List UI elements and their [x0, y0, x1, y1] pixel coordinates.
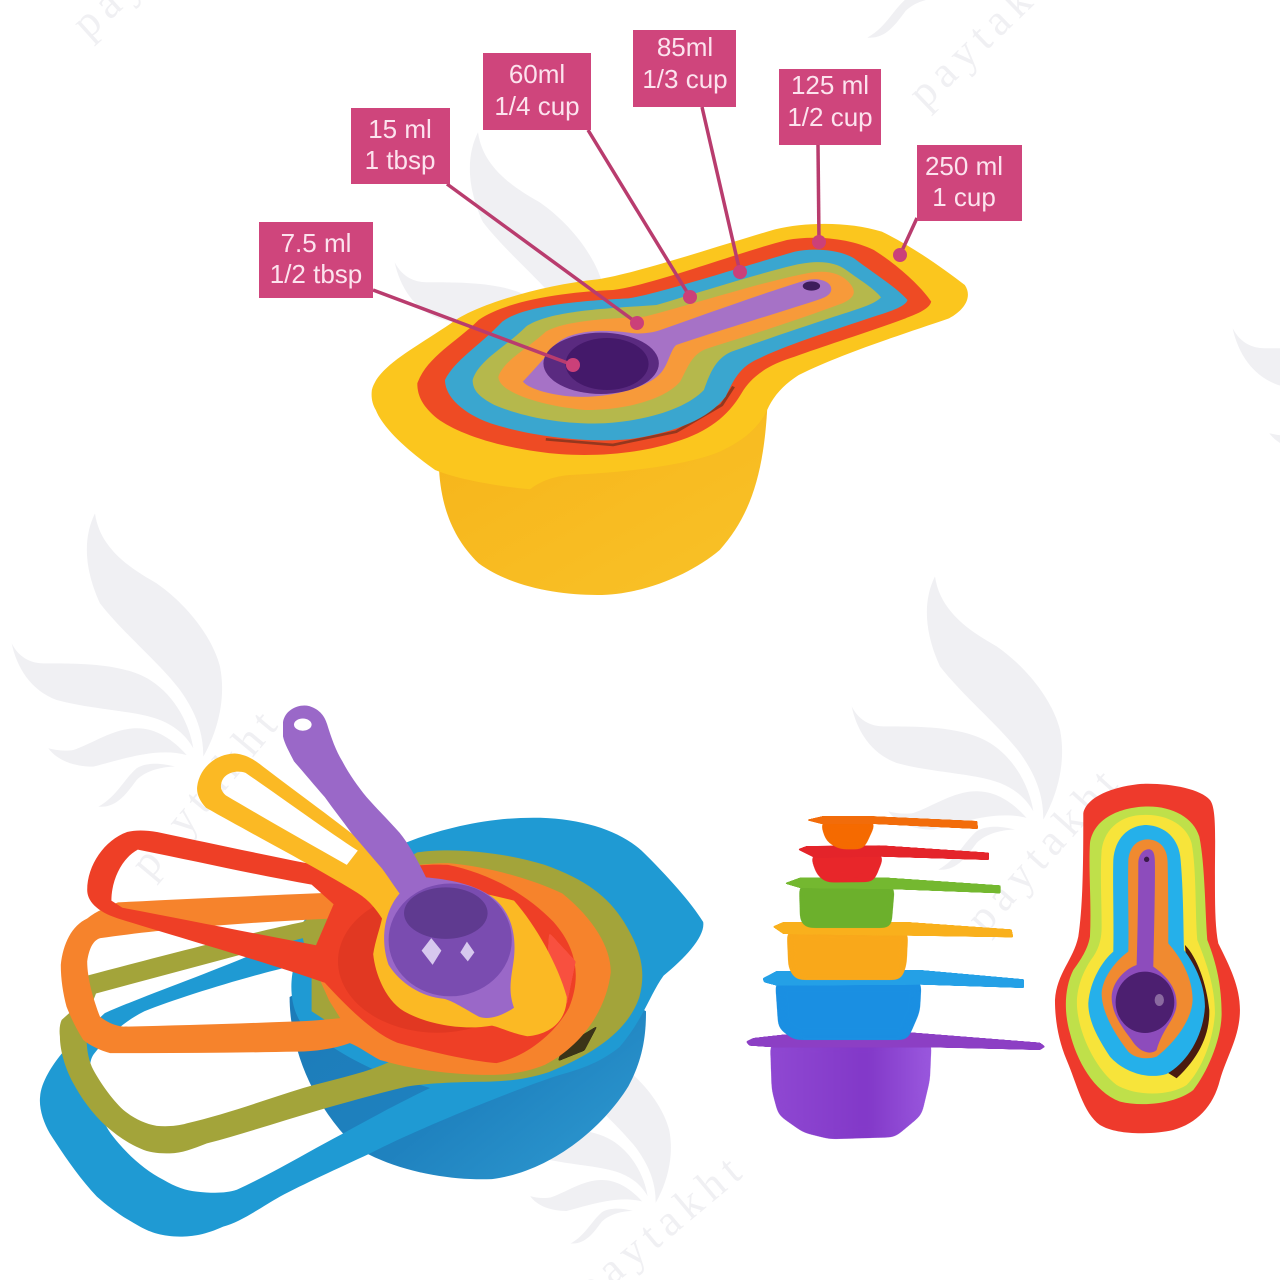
callout 15 ml	[351, 108, 644, 330]
purple cup rim and handle	[746, 1033, 1045, 1050]
purple spoon	[1112, 849, 1177, 1053]
callout 125 ml	[779, 69, 881, 249]
yellow rim and handle	[372, 224, 968, 489]
green cup rim and handle	[784, 878, 1001, 893]
spoon bowl interior	[1116, 972, 1174, 1033]
watermark text: bottom left: paytakht	[120, 696, 291, 886]
purple cup body	[770, 1040, 932, 1139]
watermark wing: right edge	[1233, 198, 1280, 492]
red layer	[417, 238, 931, 455]
callout 7.5 ml: 1/2 tbsp	[270, 259, 362, 289]
product photo: six stacked cups, side view (bottom right)	[746, 816, 1045, 1139]
callout 60 ml: 60ml	[509, 59, 565, 89]
callout 125 ml: 1/2 cup	[787, 102, 873, 132]
orange cup rim and handle	[806, 816, 978, 829]
blue layer	[1088, 825, 1205, 1076]
olive layer	[473, 262, 881, 423]
dark inner shadow	[1163, 945, 1209, 1078]
callout 60 ml: 1/4 cup	[494, 91, 580, 121]
callout 85 ml: 85ml	[657, 32, 713, 62]
callout 250 ml: 1 cup	[932, 182, 996, 212]
spoon highlights	[422, 938, 474, 965]
dark gap between olive and orange	[558, 1026, 598, 1061]
watermark wing: middle right	[852, 576, 1062, 870]
yellow cup rim and handle	[773, 922, 1013, 937]
red cup body	[809, 853, 885, 883]
orange cup body	[819, 820, 877, 849]
watermark wing: bottom centre	[500, 1006, 671, 1244]
purple spoon	[283, 706, 515, 1018]
callout 85 ml: 1/3 cup	[642, 64, 728, 94]
product photo: six nested cups, top view (bottom right)	[1055, 784, 1240, 1133]
highlight left	[422, 938, 441, 965]
callout 85 ml	[633, 30, 747, 279]
callout 15 ml: 1 tbsp	[365, 145, 435, 175]
highlight right	[460, 942, 474, 961]
watermark wing: bottom left	[12, 513, 222, 807]
red cup rim and handle	[798, 845, 989, 860]
yellow cup body	[439, 410, 767, 595]
product photo: blue nested cups with fanned handles (bottom left)	[40, 706, 703, 1237]
olive rim with loop handle	[60, 850, 642, 1153]
callout 250 ml: 250 ml	[925, 151, 1003, 181]
purple spoon bowl interior	[543, 333, 659, 394]
shadow gap under blue layer	[546, 387, 734, 445]
watermark wing: top centre	[395, 132, 605, 426]
spoon handle hole	[803, 281, 820, 291]
yellow layer	[1077, 815, 1215, 1093]
callout 60 ml	[483, 53, 697, 304]
red layer	[1055, 784, 1240, 1133]
spoon bowl interior	[389, 883, 512, 996]
watermark text: middle right: paytakht	[956, 755, 1131, 942]
callout 125 ml: 125 ml	[791, 70, 869, 100]
spoon bowl shadow	[404, 887, 488, 939]
yellow rim with loop handle	[197, 754, 567, 1036]
spoon hanging hole	[294, 719, 312, 731]
callout 7.5 ml: 7.5 ml	[281, 228, 351, 258]
red cup interior	[338, 890, 536, 1033]
blue cup body	[775, 980, 922, 1040]
purple spoon bowl shadow	[566, 338, 649, 390]
watermark wing: top right	[781, 0, 991, 38]
blue cup body	[290, 904, 646, 1179]
callout 7.5 ml	[259, 222, 580, 372]
green cup body	[799, 883, 895, 928]
spoon hanging hole	[1144, 857, 1149, 862]
purple spoon	[523, 279, 831, 397]
spoon highlight	[1155, 994, 1164, 1006]
blue cup rim and handle	[763, 970, 1024, 988]
blue rim with loop handle	[40, 818, 703, 1237]
orange layer	[498, 272, 854, 410]
lime layer	[1066, 807, 1222, 1104]
red rim with loop handle	[87, 830, 576, 1063]
callout 250 ml	[893, 145, 1022, 262]
red interior highlight	[545, 933, 576, 1004]
callout 15 ml: 15 ml	[368, 114, 432, 144]
orange rim with loop handle	[61, 863, 611, 1075]
blue layer	[445, 250, 907, 440]
orange layer	[1102, 839, 1193, 1058]
product photo: yellow nested cups (top)	[372, 224, 968, 595]
capacity callouts	[259, 30, 1022, 372]
yellow cup body	[787, 929, 908, 980]
